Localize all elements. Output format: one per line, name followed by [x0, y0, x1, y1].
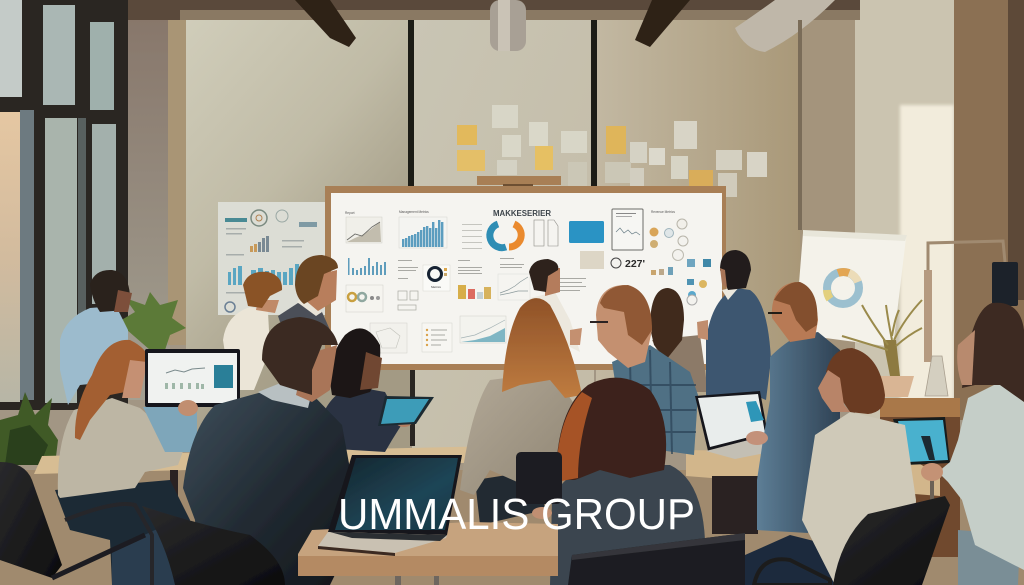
- line chart: [498, 274, 530, 300]
- person: woman dark hair behind: [650, 288, 708, 392]
- duct vertical: [490, 0, 526, 51]
- lamp pipe and fixture: [924, 241, 1018, 396]
- ceiling: [125, 0, 860, 20]
- laptop: right centre: [695, 391, 770, 459]
- chair: left: [0, 462, 152, 585]
- tablet: [378, 396, 434, 426]
- duct large: [735, 0, 835, 52]
- small donut box: [346, 285, 383, 312]
- poster bars: [250, 244, 257, 252]
- person: man blue suit: [746, 282, 840, 533]
- donut chart blue orange: [490, 224, 521, 248]
- plant by window: [118, 292, 186, 350]
- person: man navy suit far right: [697, 250, 771, 450]
- jeans: [55, 480, 190, 585]
- coloured bars: [458, 285, 491, 299]
- right icons: [650, 219, 711, 305]
- person: woman sitting left: [55, 340, 190, 585]
- hair: [75, 340, 148, 440]
- presentation board: [325, 186, 726, 370]
- presentation board: Revenue Metrics: [651, 210, 675, 214]
- small labels: Report: [345, 211, 355, 215]
- person: woman right: [921, 303, 1024, 585]
- chair: front centre: [568, 533, 745, 585]
- brand title: UMMALIS GROUP: [338, 490, 695, 539]
- wall panel: left: [186, 20, 410, 450]
- donut card: [423, 265, 450, 291]
- person: man dark suit foreground: [183, 317, 352, 585]
- laptop teal tile: [214, 365, 233, 388]
- hand on table: [532, 507, 552, 519]
- shelf: [880, 398, 960, 557]
- board tray: [477, 176, 561, 188]
- light stripe: [900, 105, 954, 425]
- tablet chart: [612, 209, 643, 250]
- laptop: left: [143, 349, 240, 452]
- chair: centre left: [142, 506, 285, 585]
- person: woman foreground with red hair: [550, 378, 705, 585]
- wall panel: far right: [800, 20, 856, 370]
- person: woman bun: [738, 348, 916, 585]
- wall panel: right: [596, 20, 801, 450]
- laptop: front: [318, 455, 462, 556]
- board title: MAKKESERIER: [493, 209, 551, 218]
- right wall light: [855, 0, 955, 420]
- torso: [60, 306, 128, 405]
- ceiling beam right: [635, 0, 690, 47]
- document sketch: [534, 220, 558, 246]
- flip chart donut: [827, 272, 859, 304]
- pillar: [168, 15, 186, 345]
- floor: [0, 470, 1024, 585]
- person: woman centre: [460, 298, 582, 525]
- poster text lines: [226, 228, 304, 294]
- chair: woman centre: [516, 452, 562, 504]
- bar chart small: [348, 258, 386, 275]
- wall panel: centre: [412, 20, 594, 450]
- person: man blue shirt: [60, 270, 132, 405]
- window frame light: [20, 110, 34, 400]
- photo tile: [580, 251, 604, 269]
- blue card: [569, 221, 604, 243]
- person: man grey suit: [278, 255, 338, 330]
- plant on shelf: [842, 300, 922, 397]
- right wall dark: [954, 0, 1024, 420]
- table: front: [298, 522, 558, 585]
- poster bar chart: [228, 264, 299, 285]
- head: [90, 270, 130, 312]
- list box: [422, 323, 452, 352]
- poster: left wall: [218, 202, 325, 315]
- number: 227': [625, 258, 645, 270]
- side wall near window: [128, 10, 170, 400]
- donut card: Metrics: [431, 285, 441, 289]
- person: man plaid shirt: [590, 285, 698, 455]
- standing legs: [712, 476, 758, 534]
- ceiling beam left: [295, 0, 356, 47]
- wall seam strips: [408, 20, 414, 188]
- person: man white shirt: [223, 272, 282, 390]
- list lines left of donut: [462, 224, 482, 249]
- person: woman navy tablet: [318, 328, 434, 452]
- table: right: [686, 450, 940, 550]
- table: left: [34, 446, 500, 510]
- sticky notes: [457, 105, 767, 197]
- window panes: [0, 0, 22, 97]
- gauge icons: [251, 210, 267, 226]
- laptop: right: [893, 417, 950, 465]
- sketch icons: [398, 291, 418, 310]
- chair: front right: [754, 496, 950, 585]
- sweater: [58, 398, 190, 498]
- laptop bars: [165, 383, 204, 389]
- hand on laptop: [178, 400, 198, 416]
- laptop base: [318, 532, 447, 553]
- right side rail: [798, 20, 802, 230]
- flip chart: [795, 230, 907, 347]
- area chart: [346, 217, 382, 243]
- text blocks: [398, 258, 586, 291]
- bar chart blue: [399, 217, 447, 248]
- person: presenter: [529, 259, 582, 352]
- presentation board: Management Metrics: [399, 210, 429, 214]
- map box: [370, 323, 407, 353]
- glass vase: [925, 356, 948, 396]
- window: [0, 0, 128, 410]
- teal area chart: [460, 316, 506, 343]
- plant lower left: [0, 392, 58, 465]
